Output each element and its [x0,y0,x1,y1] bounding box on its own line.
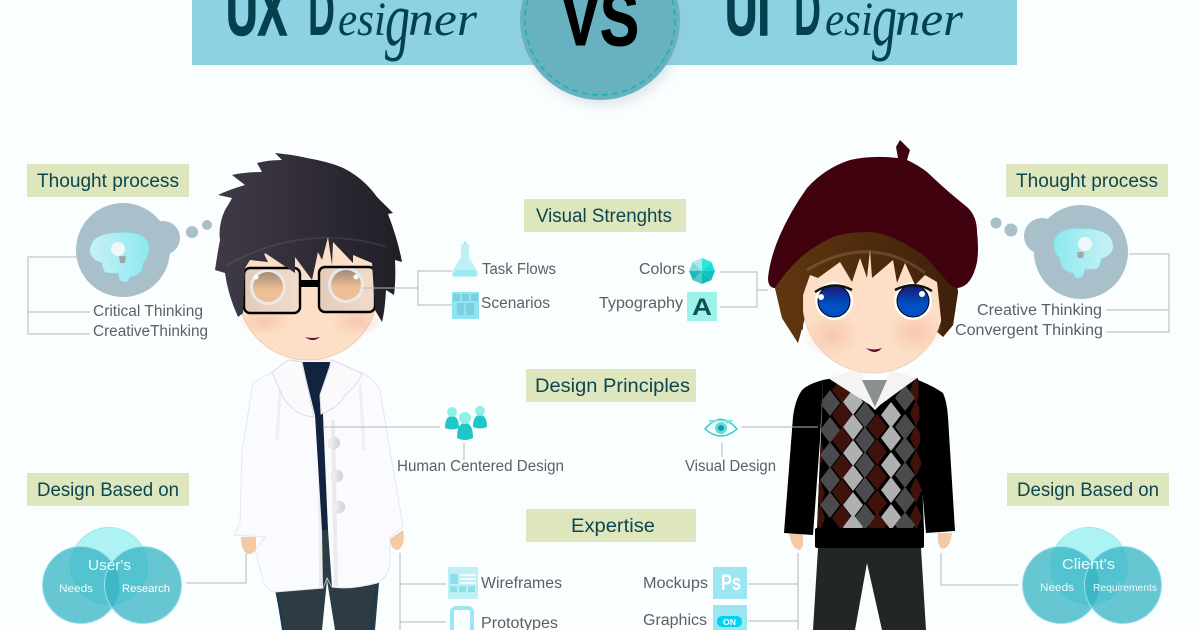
right character hands [789,533,952,550]
heading: Thought process (right) [1006,164,1168,197]
icon: eye [705,420,737,436]
icon: people group [445,406,487,440]
title: UX Designer [226,0,477,62]
left character buttons [328,437,345,513]
heading: Thought process (right): Thought process [1016,171,1158,192]
left character glasses and eyes [244,267,375,313]
label: Visual Design: Visual Design [685,458,776,475]
heading: Design Principles: Design Principles [535,376,690,397]
label: Colors: Colors [639,261,685,278]
character: UX designer [215,153,404,630]
thought labels left: Critical Thinking [93,303,203,320]
label: Wireframes: Wireframes [481,575,562,592]
heading: Design Based on (right) [1007,473,1169,506]
icon: toggle tile [713,605,747,630]
character: UI designer [768,140,978,630]
title: UI Designer [725,0,963,62]
heading: Expertise: Expertise [571,516,655,537]
left character lab coat [234,360,403,592]
label: Typography: Typography [599,295,683,312]
right character pants [813,548,926,630]
right character hair [775,225,958,343]
right character beret [768,140,978,288]
left character hands [241,530,404,554]
thought labels right [955,302,1103,339]
left character hair [215,153,402,322]
heading: Design Based on (right): Design Based on [1017,480,1159,501]
thought labels right: Creative Thinking [977,302,1102,319]
heading: Visual Strenghts [524,199,686,232]
left character pants [275,560,379,630]
right character argyle vest [815,376,924,548]
venn diagram right [1022,528,1162,624]
thought labels left [93,303,208,340]
icon: Photoshop tile: Ps [721,570,741,595]
heading: Design Based on (left): Design Based on [37,480,179,501]
icon: scenarios grid [452,292,479,319]
venn diagram right: Requirements [1093,583,1157,594]
thought labels left: CreativeThinking [93,323,208,340]
heading: Design Based on (left) [27,473,189,506]
right character sleeves [784,380,955,535]
left character shirt [302,362,330,530]
venn diagram left: Research [122,583,170,595]
venn diagram left: Needs [59,583,94,595]
title banner [192,0,1017,65]
heading: Thought process (left) [27,164,189,197]
icon: prototype device [452,608,472,630]
thought bubble left with brain icon [76,203,212,297]
icon: toggle tile: ON [723,618,736,627]
thought labels right: Convergent Thinking [955,322,1103,339]
heading: Design Principles [526,369,696,402]
right character eyes [815,282,932,320]
icon: Photoshop tile [713,567,747,599]
connector lines [28,254,1169,630]
label: Graphics: Graphics [643,612,707,629]
icon: typography tile [687,292,717,321]
label: Human Centered Design: Human Centered Design [397,458,564,475]
left character collar [272,360,362,417]
icon: flask [452,242,478,277]
icon: wireframe [448,567,478,599]
label: Task Flows: Task Flows [482,261,556,278]
thought bubble right with brain icon [990,205,1128,299]
venn diagram left [42,528,182,624]
heading: Visual Strenghts: Visual Strenghts [536,206,672,227]
icon: color wheel [689,258,715,284]
venn diagram right: Client's [1062,556,1115,573]
venn diagram right: Needs [1040,582,1075,594]
right character collar and shirt [828,368,917,410]
icon: typography tile: A [692,294,712,321]
venn diagram left: User's [88,557,131,574]
heading: Expertise [526,509,696,542]
label: Scenarios: Scenarios [481,295,550,312]
heading: Thought process (left): Thought process [37,171,179,192]
label: Mockups: Mockups [643,575,708,592]
left character face [238,220,378,360]
VS badge [520,0,680,100]
right character face [775,225,958,343]
